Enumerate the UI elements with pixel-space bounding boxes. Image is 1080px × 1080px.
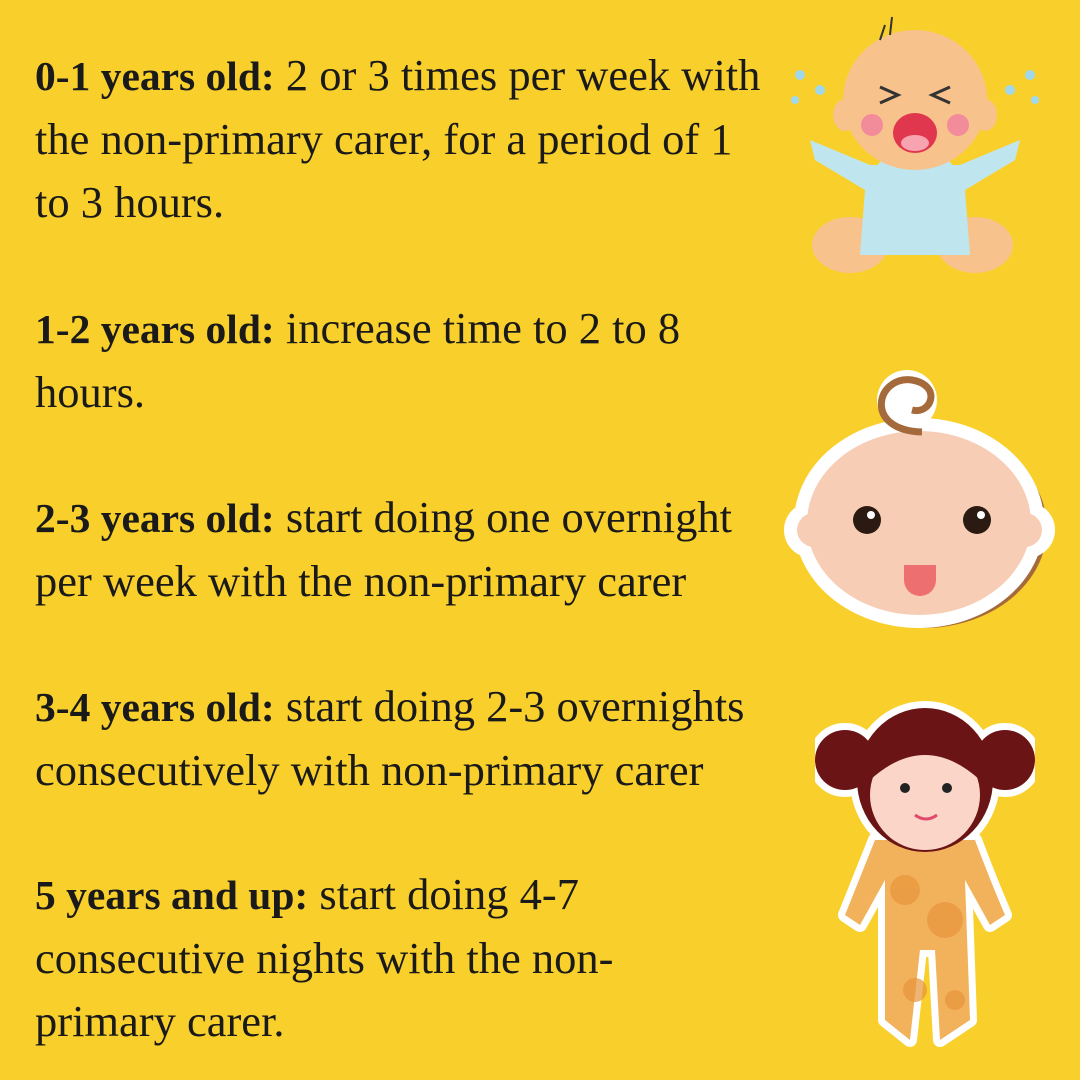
text: 0-1 years: to 3 hours. xyxy=(35,177,224,227)
text: 2-3 years xyxy=(35,492,732,606)
text: 0-1 years: 0-1 years old: 2 or 3 times per week with xyxy=(35,50,760,100)
text: 5 years and up: 5 years and up: start doing 4-7 xyxy=(35,869,579,919)
text: 3-4 years xyxy=(35,681,744,795)
icon: crying baby xyxy=(791,16,1039,273)
text: 1-2 years: 1-2 years old: increase time to 2 to 8 xyxy=(35,303,680,353)
text: 2-3 years: per week with the non-primary carer xyxy=(35,556,686,606)
text: 3-4 years: consecutively with non-primary carer xyxy=(35,745,703,795)
text: 0-1 years xyxy=(35,50,760,227)
text: 5 years and up: consecutive nights with the non- xyxy=(35,933,613,983)
icon: girl xyxy=(815,701,1035,1047)
icon: baby face xyxy=(784,370,1055,628)
text: 1-2 years xyxy=(35,303,680,417)
text: 5 years and up: primary carer. xyxy=(35,996,285,1046)
text: 0-1 years: the non-primary carer, for a period of 1 xyxy=(35,114,733,164)
text: 5 years and up xyxy=(35,869,613,1046)
text: 1-2 years: hours. xyxy=(35,367,145,417)
text: 3-4 years: 3-4 years old: start doing 2-3 overnights xyxy=(35,681,744,731)
text: 2-3 years: 2-3 years old: start doing one overnight xyxy=(35,492,732,542)
